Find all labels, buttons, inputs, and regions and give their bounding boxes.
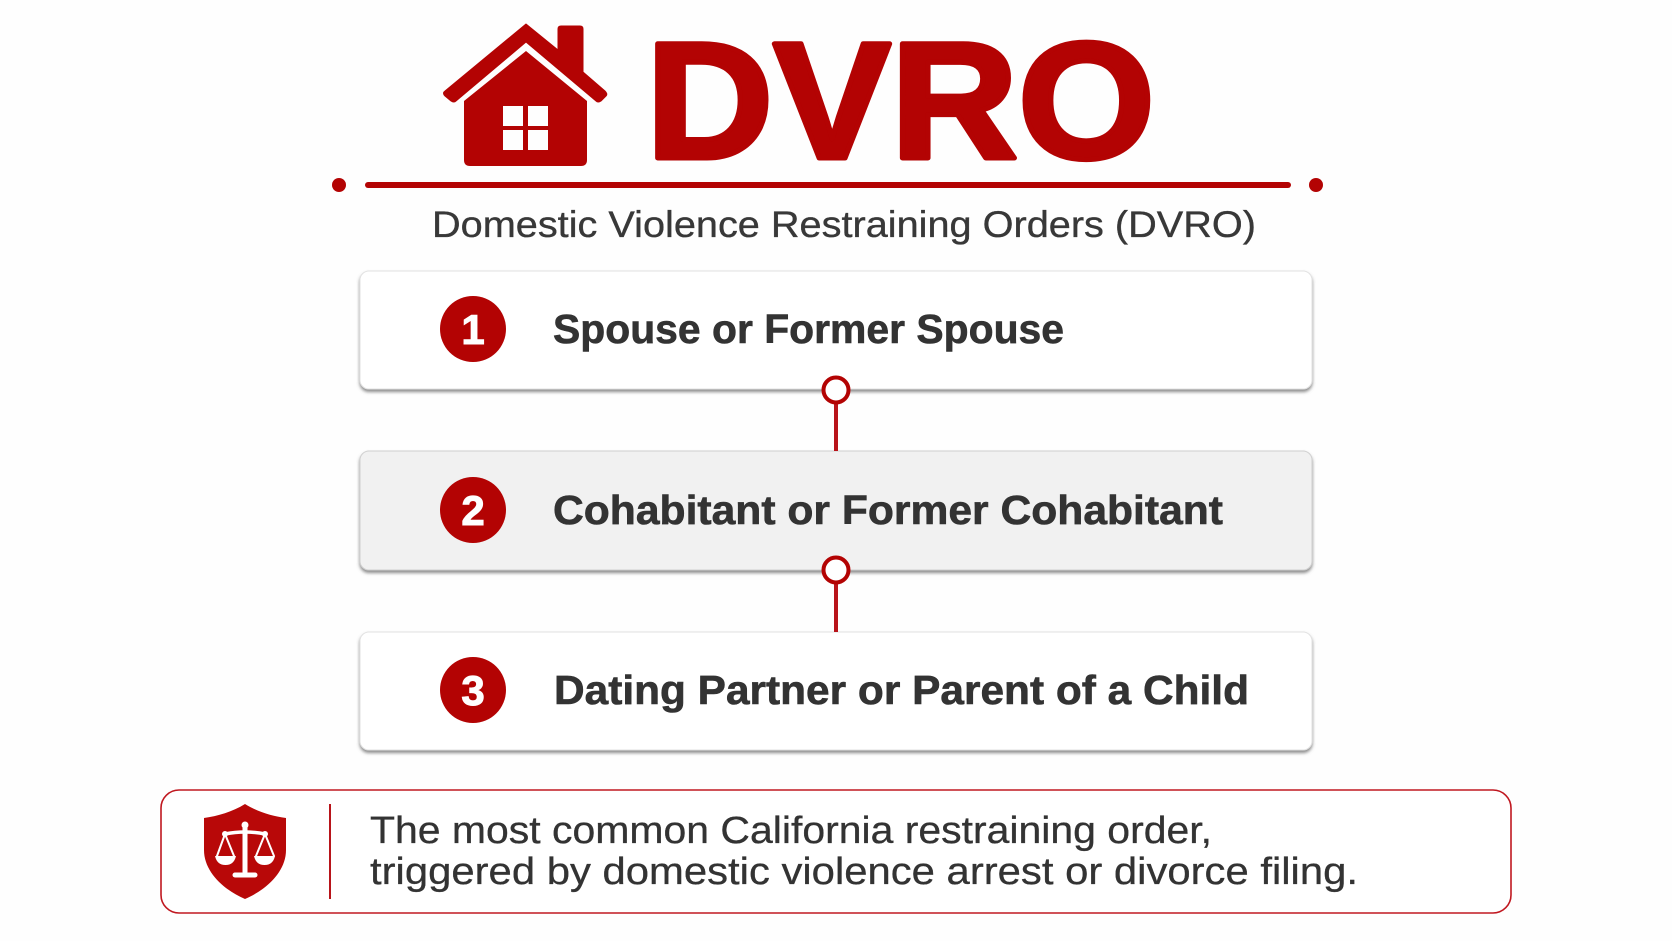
callout divider xyxy=(329,804,331,899)
number badge 2: 2 xyxy=(461,487,485,534)
title: DVRO xyxy=(646,9,1155,194)
number badge 3 xyxy=(440,657,506,723)
header: house icon, title, rule and subtitle xyxy=(332,9,1323,245)
title rule with end dots xyxy=(332,178,1323,192)
item 3 label: Dating Partner or Parent of a Child xyxy=(554,667,1249,713)
icon: house xyxy=(444,24,607,166)
callout text xyxy=(370,810,1358,893)
callout text: The most common California restraining order, xyxy=(370,810,1212,852)
callout border xyxy=(161,790,1511,913)
callout panel xyxy=(161,790,1511,913)
number badge 2 xyxy=(440,477,506,543)
icon: shield with scales xyxy=(204,804,286,899)
panel: item 2 xyxy=(360,451,1312,570)
panel: item 3 xyxy=(360,632,1312,750)
item 1 label: Spouse or Former Spouse xyxy=(553,306,1064,352)
item 2 label: Cohabitant or Former Cohabitant xyxy=(553,487,1223,533)
callout text: triggered by domestic violence arrest or divorce filing. xyxy=(370,851,1358,893)
number badge 1: 1 xyxy=(461,306,485,353)
card 1 background xyxy=(360,271,1312,389)
connector: item 2 to item 3 xyxy=(824,558,848,632)
card 3 background xyxy=(360,632,1312,750)
number badge 3: 3 xyxy=(461,667,485,714)
number badge 1 xyxy=(440,296,506,362)
card 2 background xyxy=(360,451,1312,570)
panel: item 1 xyxy=(360,271,1312,389)
subtitle: Domestic Violence Restraining Orders (DVRO) xyxy=(432,204,1256,245)
connector: item 1 to item 2 xyxy=(824,378,848,451)
